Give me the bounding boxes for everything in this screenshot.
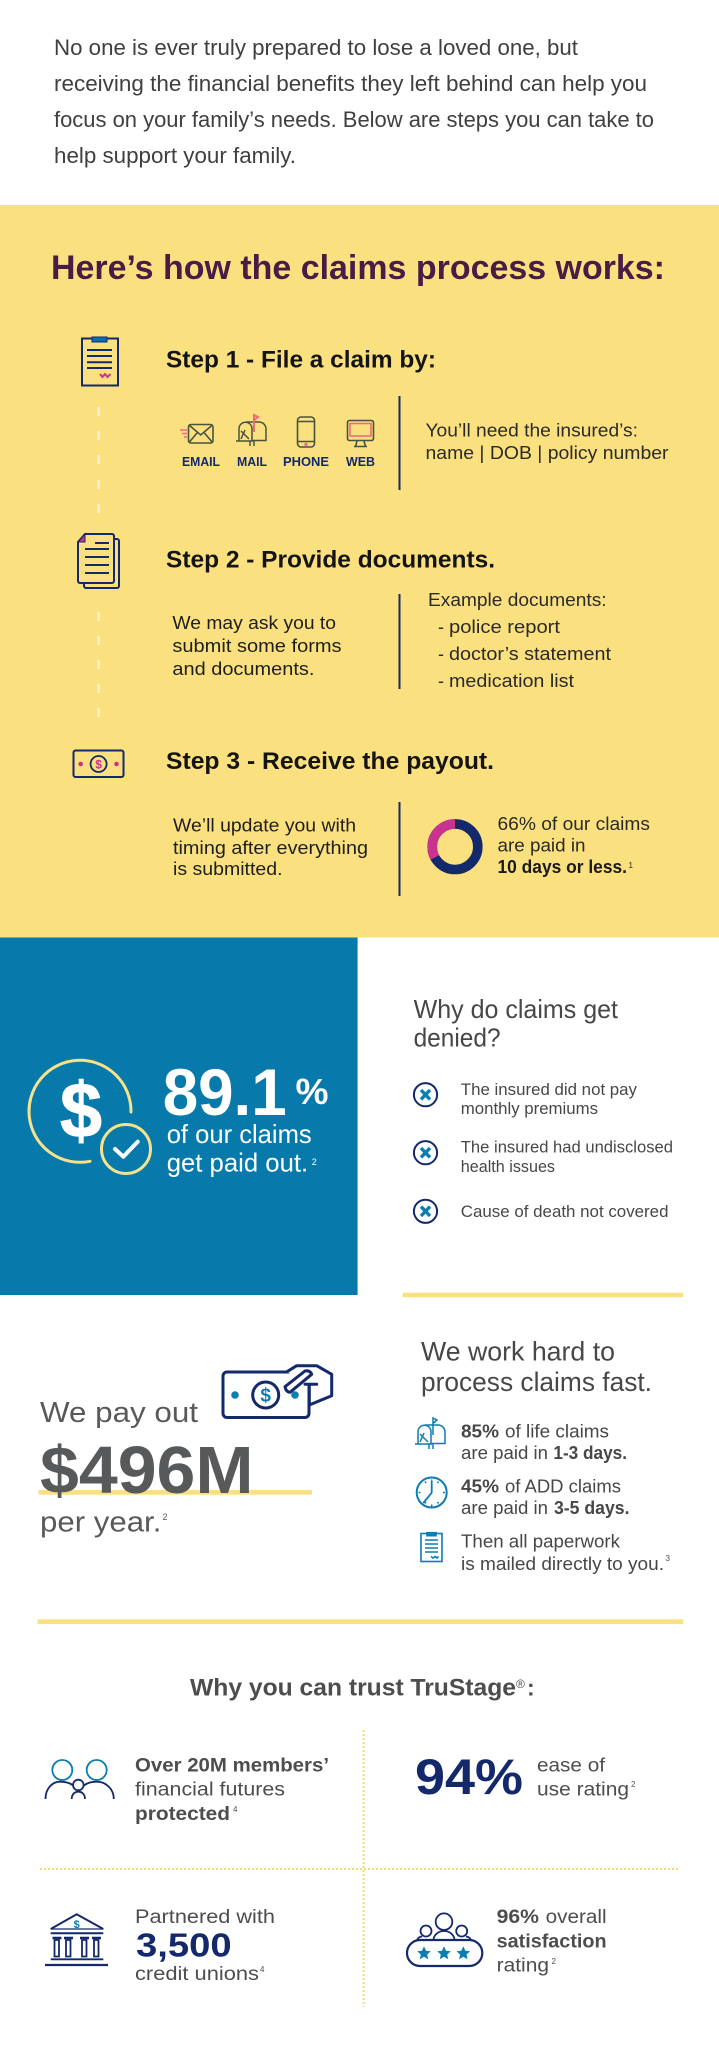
donut caption: are paid in bbox=[498, 836, 586, 856]
claims speed text: is mailed directly to you. bbox=[461, 1554, 664, 1574]
contact method labels: MAIL bbox=[237, 454, 267, 469]
ease of use label: ease of bbox=[537, 1756, 606, 1777]
intro text bbox=[54, 35, 654, 168]
claims speed text: are paid in bbox=[461, 1498, 548, 1518]
step 3 description: We’ll update you with bbox=[173, 816, 356, 836]
icon: x marks bbox=[414, 1083, 437, 1223]
panel: why trust TruStage bbox=[40, 1675, 679, 2007]
icon: bank bbox=[45, 1914, 108, 1965]
icon: dollar with check: $ bbox=[60, 1066, 102, 1154]
step 1 details bbox=[426, 421, 668, 463]
example documents list: police report bbox=[449, 617, 560, 637]
heading: process fast: We work hard to bbox=[421, 1337, 615, 1367]
stat: credit unions bbox=[135, 1907, 275, 1985]
stat: credit unions: 3,500 bbox=[136, 1927, 232, 1964]
step 2 description: We may ask you to bbox=[172, 613, 336, 633]
claims speed text: of life claims bbox=[505, 1422, 609, 1442]
label: per year: per year. bbox=[40, 1507, 161, 1539]
donut caption: 66% of our claims bbox=[498, 814, 650, 834]
icon: web bbox=[348, 420, 374, 446]
stat: members: Over 20M members’ bbox=[135, 1756, 329, 1777]
contact method labels bbox=[182, 454, 375, 469]
heading: denied: denied? bbox=[414, 1023, 501, 1053]
divider step 3 bbox=[398, 802, 400, 896]
divider step 2 bbox=[398, 594, 400, 689]
claims speed text: 1-3 days. bbox=[553, 1443, 627, 1463]
example documents list: - bbox=[438, 644, 444, 664]
example documents list: Example documents: bbox=[428, 590, 607, 610]
example documents list: doctor’s statement bbox=[449, 644, 611, 664]
stat: 89.1 percent bbox=[163, 1055, 328, 1178]
heading: trust: : bbox=[527, 1675, 535, 1701]
icon: hand with money: $ bbox=[260, 1386, 271, 1406]
claims speed text: are paid in bbox=[461, 1443, 548, 1463]
donut chart: 66 percent bbox=[432, 824, 478, 870]
panel: payout per year bbox=[38, 1366, 332, 1539]
example documents list: - bbox=[438, 671, 444, 691]
step 3 title: Step 3 - Receive the payout. bbox=[166, 748, 494, 775]
heading: claims process: Here’s how the claims process works: bbox=[51, 249, 665, 287]
stat: satisfaction: rating bbox=[497, 1956, 549, 1977]
stat: 496M: $496M bbox=[40, 1433, 254, 1508]
ease of use label: use rating bbox=[537, 1780, 629, 1801]
step 1 details: name | DOB | policy number bbox=[426, 443, 668, 463]
denial reasons: monthly premiums bbox=[461, 1100, 598, 1118]
stat: 89.1 percent: % bbox=[296, 1071, 328, 1112]
icon: email bbox=[180, 424, 213, 443]
claims speed text: Then all paperwork bbox=[461, 1532, 621, 1552]
stat: members: 4 bbox=[233, 1805, 238, 1814]
stat: members: financial futures bbox=[135, 1780, 285, 1801]
example documents list: medication list bbox=[449, 671, 574, 691]
stat: 89.1 percent: of our claims bbox=[167, 1119, 312, 1149]
donut caption: 1 bbox=[628, 861, 634, 870]
stat: members bbox=[135, 1756, 329, 1825]
stat: 94 percent: 94% bbox=[415, 1749, 523, 1805]
intro text: focus on your family’s needs. Below are steps you can take to bbox=[54, 107, 654, 132]
contact method labels: WEB bbox=[346, 454, 375, 469]
divider step 1 bbox=[398, 396, 400, 490]
stat: credit unions: credit unions bbox=[135, 1964, 259, 1985]
icon: clock bbox=[417, 1478, 447, 1508]
label: we pay out: We pay out bbox=[40, 1397, 198, 1429]
step 3 description: is submitted. bbox=[173, 859, 282, 879]
heading: trust: ® bbox=[516, 1677, 525, 1691]
step 2 description bbox=[172, 613, 342, 679]
heading: trust: Why you can trust TruStage bbox=[190, 1675, 516, 1702]
panel: claims process bbox=[0, 205, 719, 938]
stat: 89.1 percent: 2 bbox=[312, 1157, 317, 1167]
step 1 details: You’ll need the insured’s: bbox=[426, 421, 638, 441]
heading: process fast: process claims fast. bbox=[421, 1367, 652, 1397]
donut caption: 10 days or less. bbox=[498, 857, 627, 877]
heading: denied: Why do claims get bbox=[414, 994, 619, 1024]
icon: hand with money bbox=[223, 1366, 332, 1418]
denial reasons bbox=[461, 1081, 673, 1221]
label: per year: 2 bbox=[162, 1512, 168, 1522]
claims speed text: 85% bbox=[461, 1422, 499, 1442]
icon: documents bbox=[78, 534, 119, 588]
step 2 description: submit some forms bbox=[172, 636, 342, 656]
donut caption bbox=[498, 814, 650, 877]
step 2 title: Step 2 - Provide documents. bbox=[166, 547, 495, 574]
step 3 description bbox=[173, 816, 368, 879]
panel: 89.1 percent paid bbox=[0, 938, 358, 1295]
step 3 description: timing after everything bbox=[173, 838, 368, 858]
intro text: help support your family. bbox=[54, 143, 296, 168]
icon: cash bill: $ bbox=[95, 758, 102, 772]
denial reasons: The insured did not pay bbox=[461, 1081, 638, 1099]
intro text: receiving the financial benefits they left behind can help you bbox=[54, 71, 647, 96]
stat: satisfaction bbox=[497, 1907, 607, 1977]
panel: why claims get denied bbox=[414, 994, 673, 1223]
step 2 description: and documents. bbox=[172, 659, 314, 679]
icon: bank: $ bbox=[74, 1919, 80, 1931]
claims speed text bbox=[461, 1422, 670, 1574]
stat: satisfaction: satisfaction bbox=[497, 1932, 607, 1953]
intro text: No one is ever truly prepared to lose a loved one, but bbox=[54, 35, 578, 60]
icon: phone bbox=[298, 417, 314, 447]
icon: family bbox=[46, 1760, 114, 1799]
claims speed text: 3-5 days. bbox=[554, 1498, 630, 1518]
heading: denied bbox=[414, 994, 619, 1053]
contact method labels: EMAIL bbox=[182, 454, 220, 469]
claims speed text: 45% bbox=[461, 1477, 499, 1497]
panel: process claims fast bbox=[415, 1337, 670, 1574]
dashed connector 2 bbox=[97, 612, 100, 717]
icon: dollar with check bbox=[29, 1060, 150, 1174]
contact method labels: PHONE bbox=[283, 454, 329, 469]
icon: cash bill bbox=[74, 750, 124, 777]
stat: 89.1 percent: get paid out. bbox=[167, 1148, 308, 1178]
icon: rating group bbox=[407, 1913, 482, 1966]
stat: 89.1 percent: 89.1 bbox=[163, 1055, 287, 1129]
stat: credit unions: 4 bbox=[260, 1965, 265, 1974]
denial reasons: The insured had undisclosed bbox=[461, 1139, 673, 1157]
icon: clipboard bbox=[82, 337, 118, 386]
example documents list: - bbox=[438, 617, 444, 637]
ease of use label: 2 bbox=[631, 1780, 636, 1789]
stat: members: protected bbox=[135, 1804, 230, 1825]
stat: satisfaction: 2 bbox=[552, 1957, 556, 1966]
dashed connector 1 bbox=[97, 407, 100, 513]
claims speed text: of ADD claims bbox=[505, 1477, 621, 1497]
claims speed text: 3 bbox=[666, 1554, 670, 1563]
stat: satisfaction: 96% bbox=[497, 1907, 539, 1928]
denial reasons: health issues bbox=[461, 1158, 555, 1176]
icon: clipboard blue bbox=[421, 1533, 442, 1562]
heading: process fast bbox=[421, 1337, 652, 1397]
ease of use label bbox=[537, 1756, 636, 1801]
step 1 title: Step 1 - File a claim by: bbox=[166, 347, 436, 374]
icon: mailbox bbox=[236, 415, 266, 446]
stat: satisfaction: overall bbox=[546, 1907, 607, 1928]
denial reasons: Cause of death not covered bbox=[461, 1203, 668, 1221]
icon: mailbox blue bbox=[415, 1418, 445, 1449]
example documents list bbox=[428, 590, 611, 691]
stat: credit unions: Partnered with bbox=[135, 1907, 275, 1928]
